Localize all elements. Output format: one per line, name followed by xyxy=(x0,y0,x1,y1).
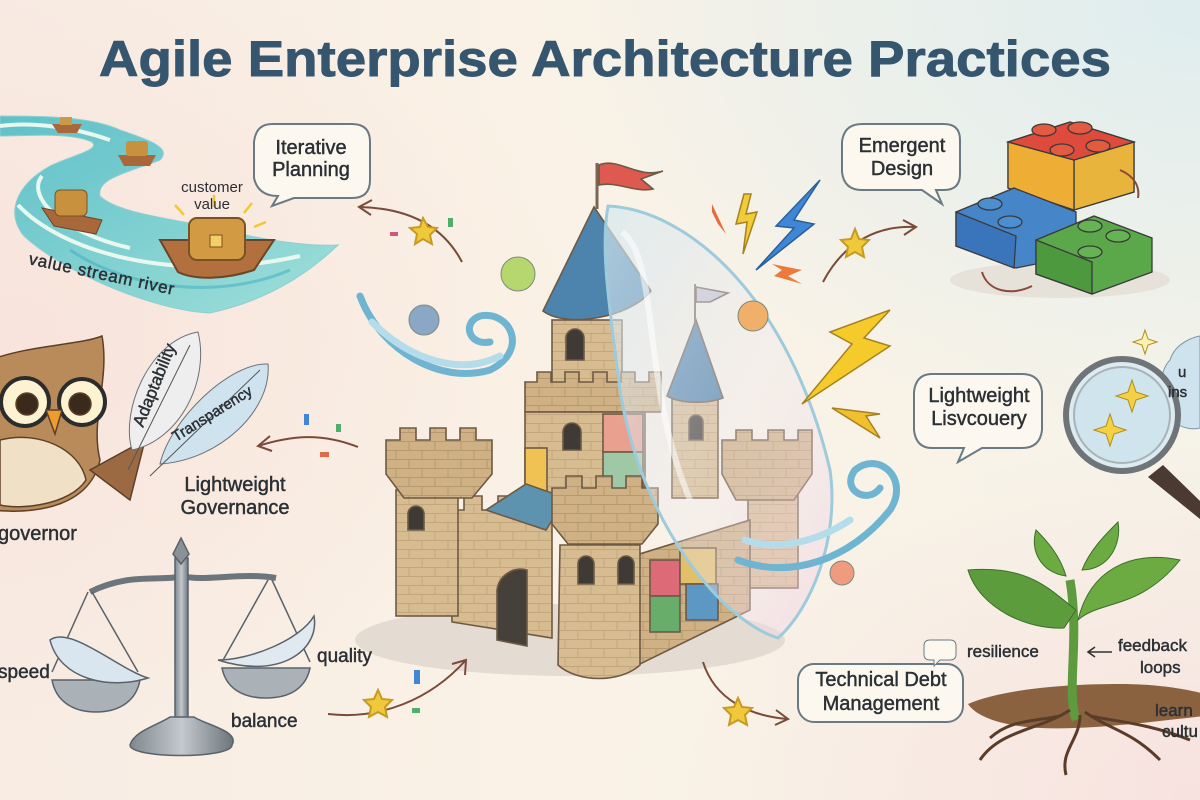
label: governor: governor xyxy=(0,523,77,545)
label: value stream river: value stream river xyxy=(27,249,176,299)
icon: small treasure boat xyxy=(118,141,156,166)
illustration: balance scale xyxy=(50,538,315,756)
icon: smileys xyxy=(409,257,854,585)
callout: Emergent Design: Design xyxy=(871,158,933,180)
icon: feather transparency xyxy=(150,364,268,476)
illustration: plant xyxy=(968,522,1200,775)
illustration: owl xyxy=(0,336,145,511)
left tower xyxy=(386,428,492,616)
label: feedback loops xyxy=(1088,636,1187,677)
icon: lightning bolts xyxy=(712,180,890,438)
callout: Iterative Planning: Iterative xyxy=(275,137,347,159)
arrow: emergent design xyxy=(823,220,916,282)
illustration: castle xyxy=(355,163,812,678)
icon: shield bubble xyxy=(605,206,832,638)
arrow: technical debt xyxy=(703,662,788,725)
label: feedback loops: loops xyxy=(1140,658,1181,677)
illustration: value stream river xyxy=(0,116,338,313)
icon: mid treasure boat xyxy=(42,190,102,234)
arrow: balance xyxy=(328,660,466,717)
callout: Lightweight Discovery xyxy=(914,374,1042,462)
label: resilience: resilience xyxy=(967,642,1039,661)
icon: small boat far xyxy=(52,117,82,133)
icon: large treasure boat xyxy=(160,195,274,278)
label: customer value: value xyxy=(194,196,230,213)
icon: feather transparency: Transparency xyxy=(169,382,256,445)
callout: Emergent Design xyxy=(842,124,960,204)
callout: Lightweight Discovery: Lightweight xyxy=(928,385,1030,407)
callout: Iterative Planning xyxy=(254,124,370,206)
icon: feather adaptability: Adaptability xyxy=(129,340,180,429)
label: learning culture: learn xyxy=(1155,701,1193,720)
callout: Lightweight Discovery: Lisvcouery xyxy=(931,408,1027,430)
keep tower xyxy=(525,320,661,524)
swirl: wind xyxy=(360,296,897,568)
illustration: magnifying glass: ins xyxy=(1168,384,1187,401)
callout: Technical Debt Management xyxy=(798,640,963,722)
main walls xyxy=(450,484,750,664)
callout: Technical Debt Management: Management xyxy=(823,693,940,715)
illustration: magnifying glass: u xyxy=(1178,364,1186,381)
label: quality: quality xyxy=(317,646,372,667)
arrow: lightweight governance xyxy=(258,414,358,457)
callout: Emergent Design: Emergent xyxy=(859,135,946,157)
title: Agile Enterprise Architecture Practices xyxy=(99,31,1111,87)
icon: blue spire xyxy=(543,207,651,320)
label: feedback loops: feedback xyxy=(1118,636,1187,655)
illustration: building blocks xyxy=(950,122,1170,298)
callout: Iterative Planning: Planning xyxy=(272,159,350,181)
icon: feather adaptability xyxy=(128,332,201,470)
small tower inside bubble xyxy=(667,284,728,498)
label: Lightweight Governance: Governance xyxy=(181,497,289,519)
illustration: magnifying glass xyxy=(1066,330,1200,519)
callout: Technical Debt Management: Technical Debt xyxy=(815,669,947,691)
front tower xyxy=(552,476,658,678)
icon: red flag xyxy=(599,163,663,190)
right tower xyxy=(722,430,812,588)
arrow: iterative planning xyxy=(359,200,462,262)
label: balance: balance xyxy=(231,711,298,732)
label: customer value: customer xyxy=(181,179,243,196)
label: learning culture: cultu xyxy=(1162,722,1198,741)
label: Lightweight Governance: Lightweight xyxy=(184,474,286,496)
